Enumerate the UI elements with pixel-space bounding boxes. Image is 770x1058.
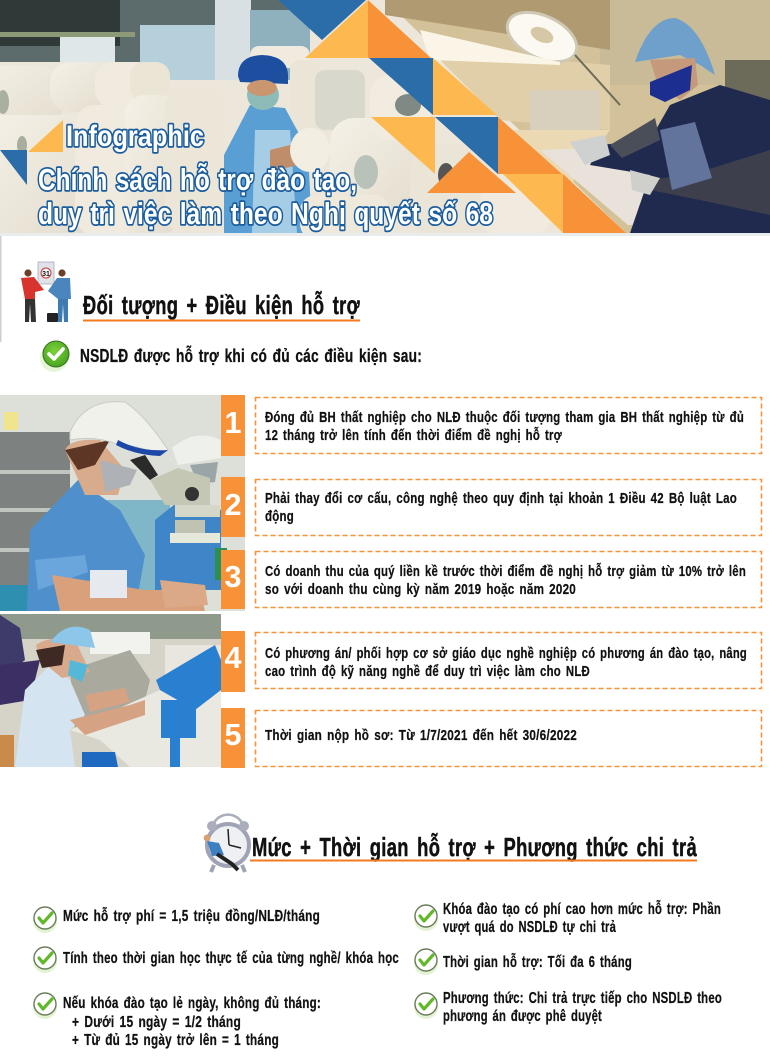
condition 1 [256,398,762,454]
item: actual duration [33,947,399,973]
header title: Chính sách hỗ trợ đào tạo, [38,162,357,197]
header photo: textile factory and worker [0,0,770,240]
item: higher fee courses [414,901,721,936]
heading: target and conditions: Đối tượng + Điều kiện hỗ trợ [83,290,360,320]
number tabs: 2 [224,487,242,522]
number tabs: 1 [224,405,242,440]
item: higher fee courses: vượt quá do NSDLĐ tự chi trả [443,919,616,936]
item: maximum duration: Thời gian hỗ trợ: Tối đa 6 tháng [443,954,632,971]
right photo background [404,18,725,233]
icon: green check [40,341,69,372]
condition 5: Thời gian nộp hồ sơ: Từ 1/7/2021 đến hết 30/6/2022 [265,727,577,744]
condition 4 [256,632,762,688]
photo: workers at microscopes [0,395,245,611]
intro text: NSDLĐ được hỗ trợ khi có đủ các điều kiện sau: [80,345,422,366]
right support list [414,901,722,1025]
left support list [33,907,399,1049]
item: partial months: + Dưới 15 ngày = 1/2 tháng [72,1014,241,1031]
condition 5 [256,710,762,766]
right worker [540,18,770,233]
item: fee level [33,907,320,933]
header banner [0,0,770,240]
condition 2 [256,480,762,536]
number tabs: 4 [224,640,242,675]
decorative triangles [0,0,626,233]
item: maximum duration [414,949,632,975]
rolls foreground centre [330,118,410,200]
header title: Infographic [66,120,204,153]
second worker [155,500,221,590]
condition 4: cao trình độ kỹ năng nghề để duy trì việc làm cho NLĐ [265,663,590,680]
condition 1: 12 tháng trở lên tính đến thời điểm đề nghị hỗ trợ [265,427,562,444]
condition 3 [256,552,762,608]
microscope [150,468,210,505]
worker [224,55,314,233]
item: partial months: + Từ đủ 15 ngày trở lên = 1 tháng [72,1032,279,1049]
main worker [27,480,145,611]
icon: handshake with calendar: 31 [42,271,50,278]
number tabs: 5 [224,717,242,752]
header title [38,120,493,231]
item: fee level: Mức hỗ trợ phí = 1,5 triệu đồng/NLĐ/tháng [63,908,320,925]
condition 2: động [265,508,294,525]
item: payment method: phương án được phê duyệt [443,1008,602,1025]
number tabs [221,395,245,768]
photo: worker at machine [0,614,221,767]
number tabs: 3 [224,559,242,594]
item: partial months [33,993,321,1049]
worker [15,665,85,767]
item: payment method [414,990,722,1025]
icon: handshake with calendar [21,262,71,322]
condition 3: so với doanh thu cùng kỳ năm 2019 hoặc năm 2020 [265,581,576,598]
rolls mid back [250,46,310,68]
item: actual duration: Tính theo thời gian học thực tế của từng nghề/ khóa học [63,950,399,967]
item: partial months: Nếu khóa đào tạo lẻ ngày, không đủ tháng: [63,995,321,1012]
rolls left [0,66,62,115]
icon: man on alarm clock [204,815,249,872]
header title: duy trì việc làm theo Nghị quyết số 68 [38,196,493,231]
